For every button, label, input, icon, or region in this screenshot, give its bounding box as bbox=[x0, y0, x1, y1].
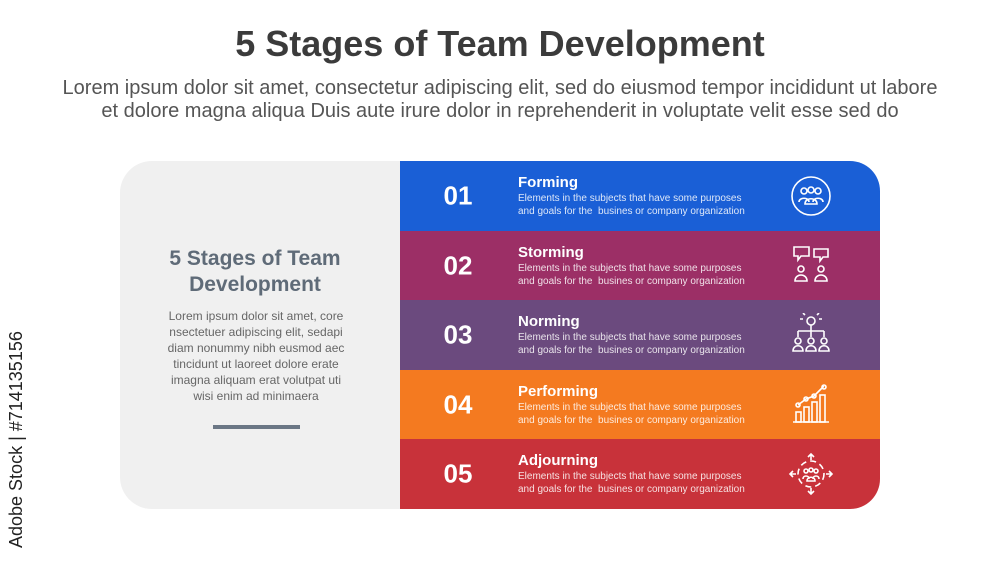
left body text: diam nonummy nibh eusmod aec bbox=[168, 341, 344, 355]
subtitle: Lorem ipsum dolor sit amet, consectetur adipiscing elit, sed do eiusmod tempor incididunt ut labore bbox=[63, 77, 937, 99]
row 02: Storming bbox=[518, 244, 584, 261]
row 01: Elements in the subjects that have some purposes bbox=[518, 193, 741, 204]
row 05: Elements in the subjects that have some purposes bbox=[518, 471, 741, 482]
row 04: 04 bbox=[444, 389, 472, 419]
icon: growth chart bbox=[793, 384, 829, 423]
row 05: and goals for the busines or company organization bbox=[518, 484, 745, 495]
subtitle: et dolore magna aliqua Duis aute irure dolor in reprehenderit in voluptate velit esse sed do bbox=[101, 100, 899, 122]
left heading: Development bbox=[189, 273, 321, 296]
row 05: 05 bbox=[444, 458, 472, 488]
row 02 bbox=[400, 231, 880, 300]
row 01: 01 bbox=[444, 180, 472, 210]
icon: discussion bbox=[793, 246, 829, 282]
row 02: and goals for the busines or company organization bbox=[518, 276, 745, 287]
icon: team circle bbox=[791, 176, 831, 216]
row 04: and goals for the busines or company organization bbox=[518, 415, 745, 426]
left body text bbox=[168, 309, 344, 403]
panel: left summary bbox=[120, 161, 410, 509]
row 05 bbox=[400, 439, 880, 509]
left body text: imagna aliquam erat volutpat uti bbox=[171, 373, 341, 387]
side watermark: Adobe Stock | #714135156 bbox=[6, 331, 26, 548]
row 04 bbox=[400, 370, 880, 439]
left heading: 5 Stages of Team bbox=[169, 247, 341, 270]
left body text: tincidunt ut laoreet dolore erate bbox=[173, 357, 339, 371]
row 03: and goals for the busines or company organization bbox=[518, 345, 745, 356]
row 04: Performing bbox=[518, 383, 598, 400]
left heading bbox=[169, 247, 341, 296]
left body text: Lorem ipsum dolor sit amet, core bbox=[169, 309, 343, 323]
row 04: Elements in the subjects that have some purposes bbox=[518, 402, 741, 413]
left body text: wisi enim ad minimaera bbox=[193, 389, 319, 403]
icon: hierarchy bbox=[792, 313, 830, 352]
icon: team dispersal bbox=[789, 453, 833, 495]
subtitle bbox=[63, 77, 937, 122]
row 03 bbox=[400, 300, 880, 370]
row 05: Adjourning bbox=[518, 452, 598, 469]
row 01: and goals for the busines or company organization bbox=[518, 206, 745, 217]
row 03: Norming bbox=[518, 313, 580, 330]
left divider bar bbox=[213, 425, 300, 429]
row 03: 03 bbox=[444, 320, 472, 350]
row 03: Elements in the subjects that have some purposes bbox=[518, 332, 741, 343]
row 02: 02 bbox=[444, 250, 472, 280]
title: 5 Stages of Team Development bbox=[235, 23, 765, 64]
row 01: Forming bbox=[518, 174, 578, 191]
left body text: nsectetuer adipiscing elit, sedapi bbox=[169, 325, 343, 339]
row 01 bbox=[400, 161, 880, 231]
row 02: Elements in the subjects that have some purposes bbox=[518, 263, 741, 274]
